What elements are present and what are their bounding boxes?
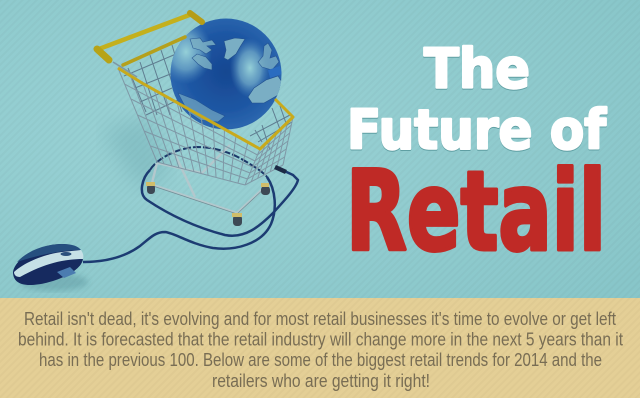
title line: Future of: Future of bbox=[347, 98, 606, 162]
title line: The: The bbox=[424, 38, 530, 100]
cart basket mesh bbox=[118, 68, 293, 185]
intro text: retailers who are getting it right! bbox=[212, 371, 430, 391]
sea bbox=[268, 66, 282, 78]
grey wire joining handle and rim bbox=[113, 62, 137, 77]
cable behind cart bbox=[150, 147, 267, 177]
background: teal textured wall bbox=[0, 0, 640, 298]
cart shadow bbox=[103, 115, 170, 190]
title bbox=[346, 38, 606, 276]
intro text bbox=[18, 309, 623, 391]
continents bbox=[178, 38, 282, 122]
yellow basket rim bbox=[118, 68, 293, 149]
yellow cart handle bbox=[97, 13, 202, 65]
cart chassis and wheels bbox=[146, 145, 270, 226]
mouse cable bbox=[83, 168, 298, 262]
cable plug bbox=[275, 167, 286, 172]
shopping cart rear mesh bbox=[124, 45, 292, 150]
wheel right bbox=[261, 183, 270, 195]
globe bbox=[160, 18, 282, 130]
illustration: cart, globe and mouse bbox=[13, 13, 298, 291]
wheel left bbox=[146, 182, 155, 194]
computer mouse bbox=[13, 244, 88, 291]
panel: intro band bbox=[0, 298, 640, 398]
wheel front bbox=[232, 213, 242, 226]
